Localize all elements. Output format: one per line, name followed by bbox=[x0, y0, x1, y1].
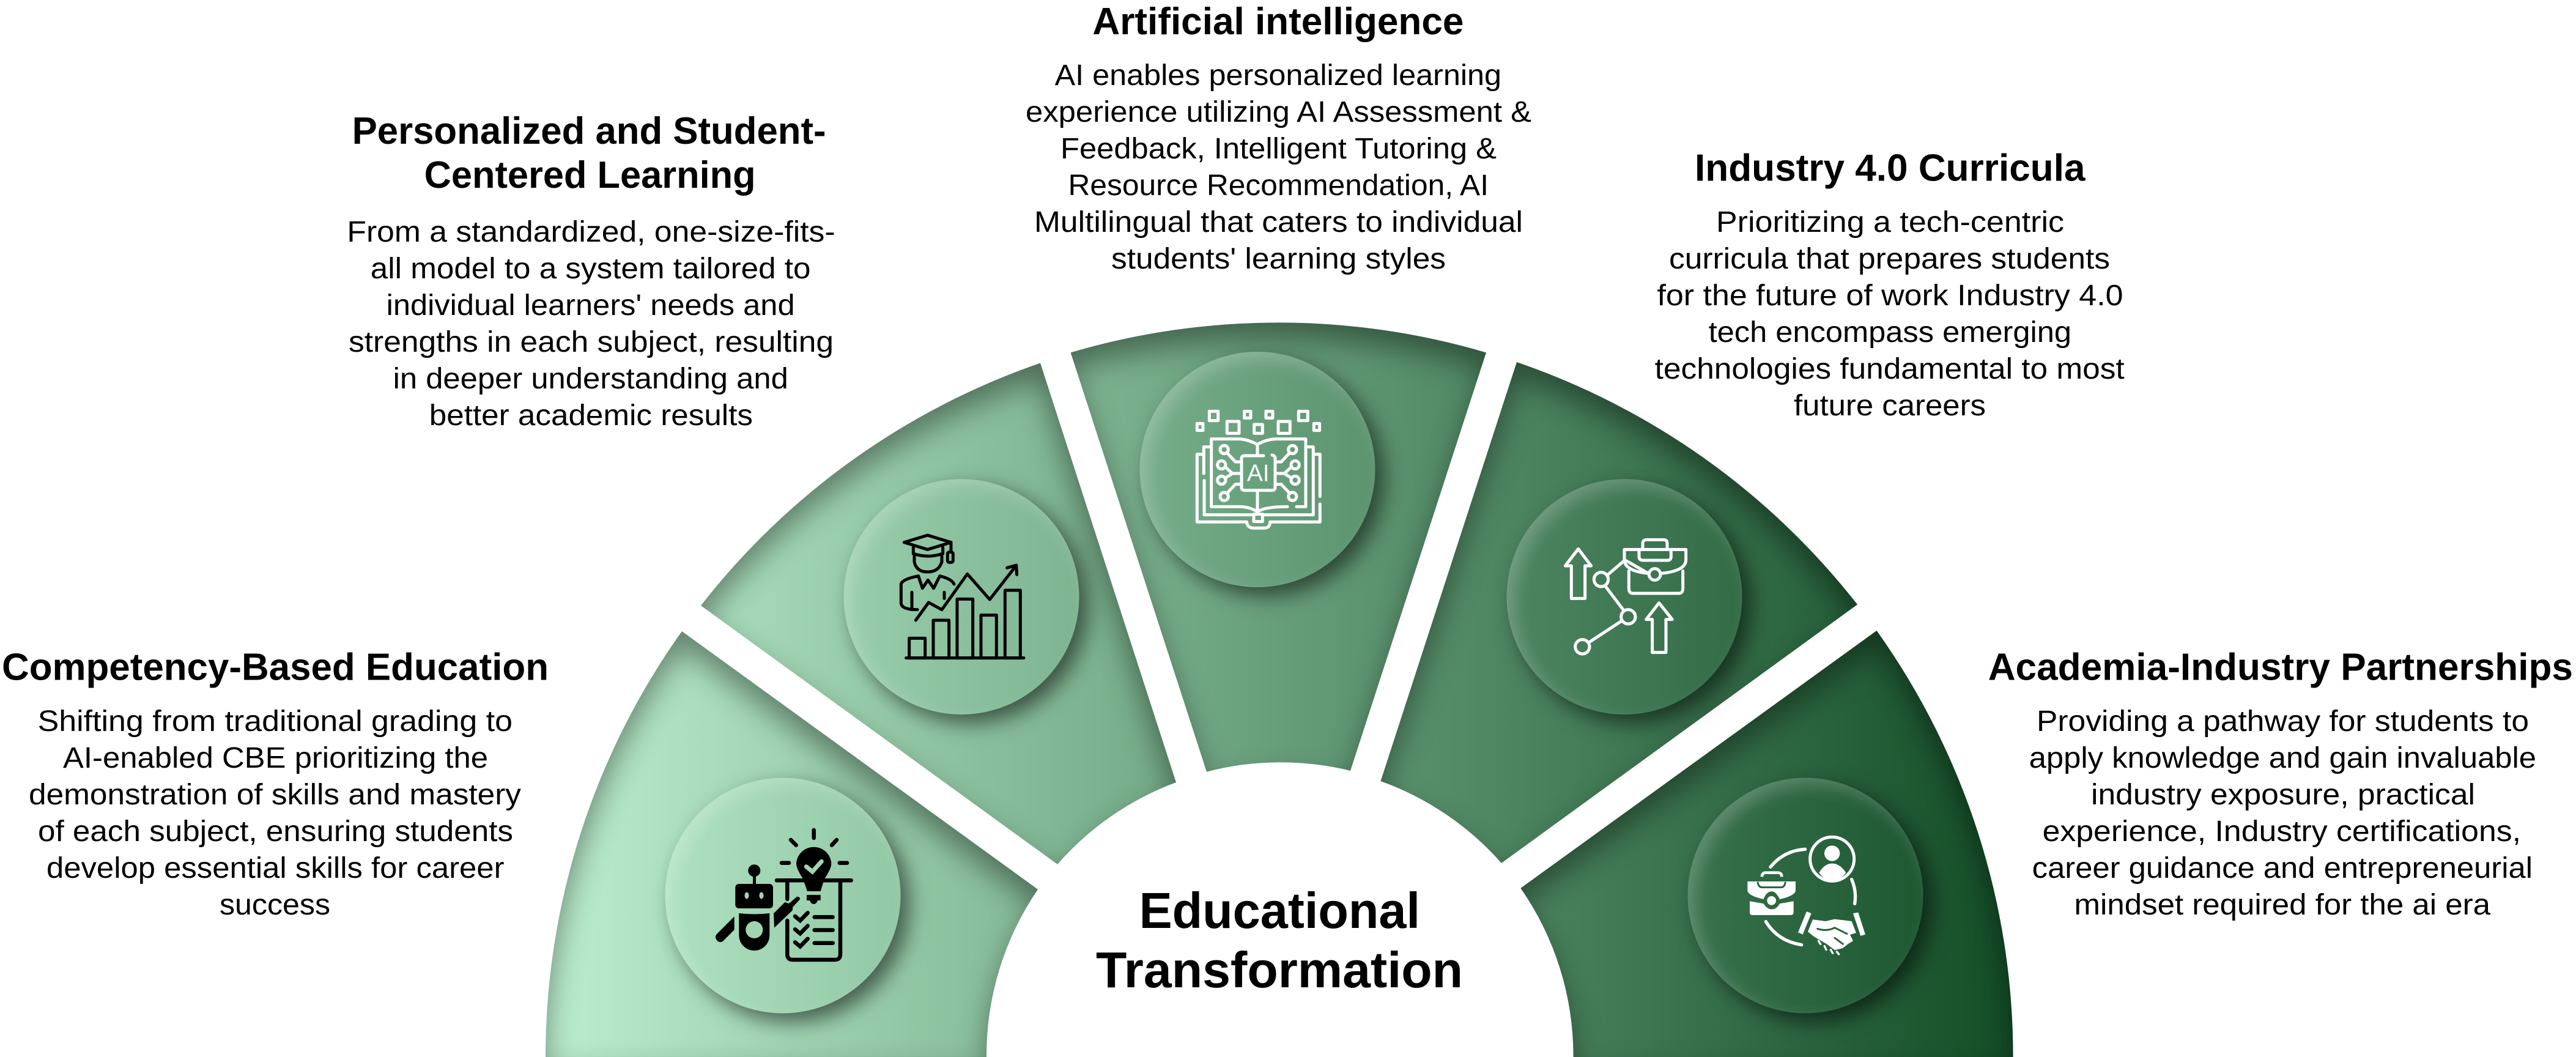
heading: Personalized and Student-Centered Learning: Centered Learning bbox=[424, 154, 756, 196]
body: industry curricula description: tech encompass emerging bbox=[1709, 316, 2071, 349]
body: personalized learning description: From a standardized, one-size-fits- bbox=[347, 216, 835, 248]
text block: Personalized and Student-Centered Learning bbox=[347, 110, 835, 432]
body: artificial intelligence description: Multilingual that caters to individual bbox=[1034, 206, 1523, 239]
heading: Competency-Based Education: Competency-Based Education bbox=[2, 647, 549, 689]
text block: Artificial intelligence bbox=[1026, 1, 1531, 275]
body: Competency-Based Education description: AI-enabled CBE prioritizing the bbox=[63, 742, 488, 774]
body: Competency-Based Education description: success bbox=[220, 889, 330, 921]
icon: career path with briefcase and arrows bbox=[1565, 540, 1686, 654]
body: partnerships description: apply knowledge and gain invaluable bbox=[2029, 742, 2536, 774]
body: industry curricula description: for the future of work Industry 4.0 bbox=[1657, 280, 2123, 312]
body: personalized learning description: all model to a system tailored to bbox=[371, 253, 811, 285]
body: Competency-Based Education description: of each subject, ensuring students bbox=[38, 815, 513, 848]
title: Educational Transformation bbox=[1096, 882, 1463, 998]
body: partnerships description bbox=[2029, 705, 2536, 921]
body: personalized learning description bbox=[347, 216, 835, 432]
body: artificial intelligence description: experience utilizing AI Assessment & bbox=[1026, 96, 1531, 128]
disc: industry 4.0 curricula bbox=[1507, 479, 1742, 714]
body: artificial intelligence description: AI enables personalized learning bbox=[1055, 59, 1501, 92]
body: partnerships description: mindset required for the ai era bbox=[2074, 889, 2490, 921]
body: Competency-Based Education description: Shifting from traditional grading to bbox=[38, 705, 513, 738]
title: Educational Transformation: Educational bbox=[1139, 882, 1420, 939]
body: Competency-Based Education description bbox=[29, 705, 521, 921]
body: personalized learning description: better academic results bbox=[429, 399, 753, 432]
title: Educational Transformation: Transformation bbox=[1096, 941, 1463, 998]
segment: academia-industry partnerships bbox=[1520, 631, 2013, 1057]
icon: robot with checklist and light bulb bbox=[716, 830, 851, 960]
icon: person, briefcase and handshake cycle bbox=[1747, 837, 1865, 954]
icon: AI open book bbox=[1197, 411, 1320, 528]
heading: Industry 4.0 Curricula: Industry 4.0 Curricula bbox=[1695, 147, 2086, 190]
disc: personalized learning bbox=[844, 479, 1079, 714]
body: artificial intelligence description: students' learning styles bbox=[1111, 243, 1446, 275]
text block: Competency-Based Education bbox=[2, 647, 549, 921]
body: partnerships description: Providing a pathway for students to bbox=[2037, 705, 2529, 738]
body: personalized learning description: strengths in each subject, resulting bbox=[349, 326, 834, 358]
body: Competency-Based Education description: develop essential skills for career bbox=[46, 852, 505, 885]
body: industry curricula description: Prioritizing a tech-centric bbox=[1716, 206, 2064, 239]
disc: competency-based education bbox=[665, 778, 900, 1013]
icon: graduate with rising chart bbox=[901, 535, 1024, 658]
segment: competency-based education bbox=[546, 631, 1038, 1057]
segment: artificial intelligence bbox=[1071, 322, 1486, 772]
disc: academia-industry partnerships bbox=[1688, 778, 1923, 1013]
body: industry curricula description bbox=[1655, 206, 2125, 422]
heading: Personalized and Student-Centered Learning bbox=[352, 110, 826, 196]
body: Competency-Based Education description: demonstration of skills and mastery bbox=[29, 779, 521, 811]
body: personalized learning description: individual learners' needs and bbox=[387, 289, 795, 322]
body: partnerships description: career guidance and entrepreneurial bbox=[2032, 852, 2533, 885]
text block: Industry 4.0 Curricula bbox=[1655, 147, 2125, 422]
body: partnerships description: experience, Industry certifications, bbox=[2043, 815, 2521, 848]
heading: Artificial intelligence: Artificial intelligence bbox=[1092, 1, 1464, 43]
body: artificial intelligence description: Resource Recommendation, AI bbox=[1068, 169, 1489, 202]
body: industry curricula description: curricula that prepares students bbox=[1669, 243, 2110, 275]
segment: industry 4.0 curricula bbox=[1381, 362, 1857, 863]
body: personalized learning description: in deeper understanding and bbox=[393, 363, 788, 395]
body: artificial intelligence description bbox=[1026, 59, 1531, 275]
segment: personalized learning bbox=[701, 363, 1176, 864]
heading: Personalized and Student-Centered Learning: Personalized and Student- bbox=[352, 110, 826, 152]
heading: Academia-Industry Partnerships: Academia-Industry Partnerships bbox=[1988, 647, 2573, 689]
disc: artificial intelligence bbox=[1140, 352, 1375, 587]
body: industry curricula description: future careers bbox=[1794, 390, 1986, 422]
icon: AI open book: AI bbox=[1247, 461, 1270, 487]
body: partnerships description: industry exposure, practical bbox=[2091, 779, 2475, 811]
body: industry curricula description: technologies fundamental to most bbox=[1655, 353, 2125, 385]
panel: semicircle diagram bbox=[546, 322, 2013, 1057]
body: artificial intelligence description: Feedback, Intelligent Tutoring & bbox=[1060, 133, 1497, 165]
text block: Academia-Industry Partnerships bbox=[1988, 647, 2573, 921]
